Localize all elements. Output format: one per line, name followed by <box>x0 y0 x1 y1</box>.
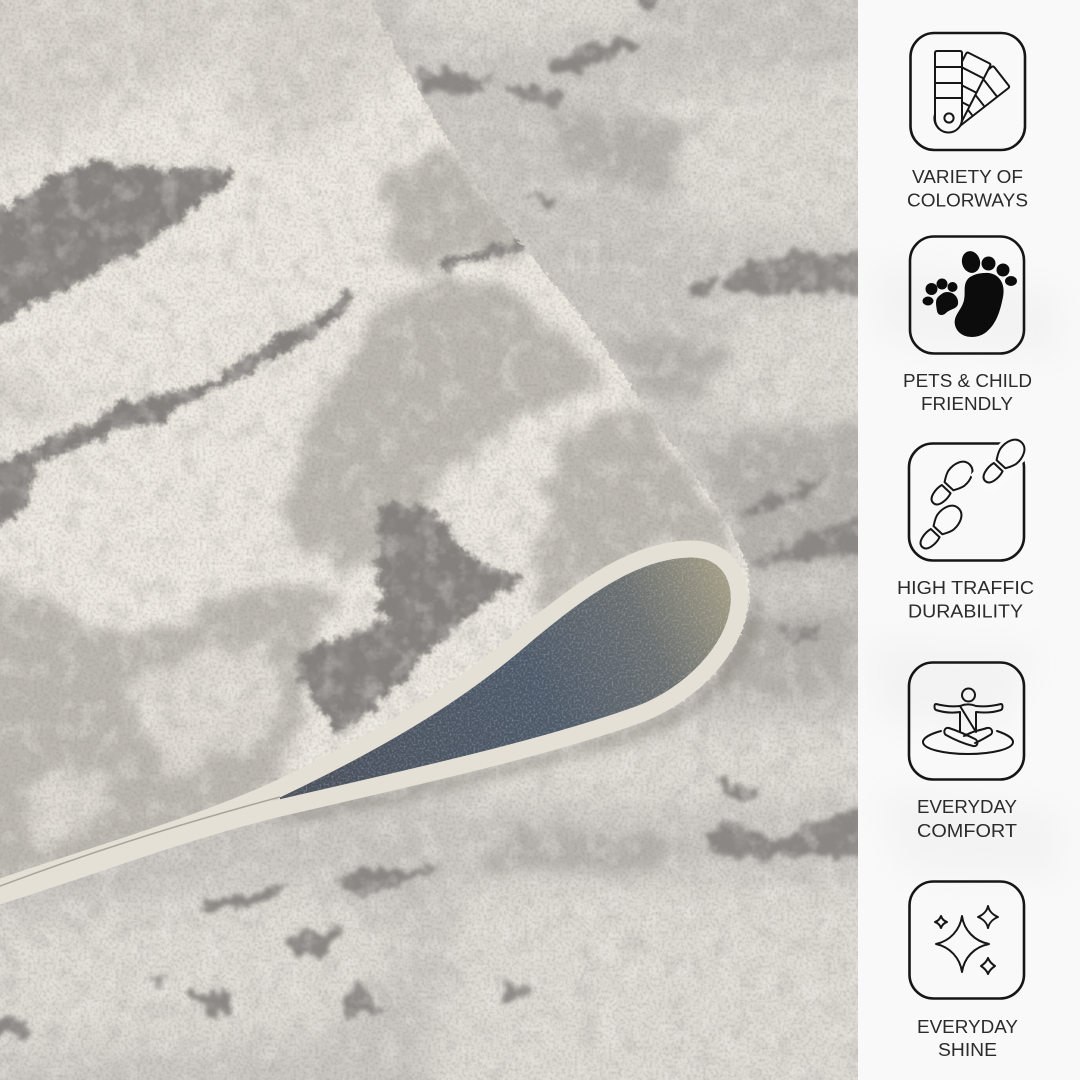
label: variety of colorways: COLORWAYS <box>907 190 1028 210</box>
underside weave texture <box>280 558 731 799</box>
label: everyday comfort: COMFORT <box>917 821 1017 841</box>
mottled dark texture <box>0 0 858 1080</box>
label: everyday shine: EVERYDAY <box>917 1017 1018 1037</box>
icon: child foot and paw <box>910 236 1024 354</box>
feature: high traffic durability <box>897 428 1036 622</box>
label: pets and child friendly: PETS & CHILD <box>903 371 1032 391</box>
rug underside <box>280 549 739 808</box>
label: variety of colorways: VARIETY OF <box>912 167 1023 187</box>
feature: variety of colorways <box>907 33 1028 210</box>
icon: meditating person <box>909 662 1024 780</box>
label: everyday shine: SHINE <box>938 1040 997 1060</box>
label: pets and child friendly: FRIENDLY <box>921 394 1013 414</box>
icon: colour swatch fan <box>910 33 1025 150</box>
rolled rug front <box>0 0 750 878</box>
label: high traffic durability: DURABILITY <box>908 602 1023 622</box>
icon: footsteps <box>909 428 1036 560</box>
icon: sparkles <box>910 882 1024 998</box>
grain texture <box>0 0 858 1080</box>
feature: everyday comfort <box>909 662 1024 841</box>
label: everyday comfort: EVERYDAY <box>917 797 1017 817</box>
feature: pets and child friendly <box>903 236 1032 414</box>
feature: everyday shine <box>910 882 1024 1060</box>
label: high traffic durability: HIGH TRAFFIC <box>897 578 1034 598</box>
shadow under rolled edge <box>280 600 758 820</box>
white features panel <box>858 0 1080 1080</box>
binding stitch line <box>0 797 280 888</box>
rug binding edge <box>0 549 739 897</box>
mottled light texture <box>0 0 858 1080</box>
